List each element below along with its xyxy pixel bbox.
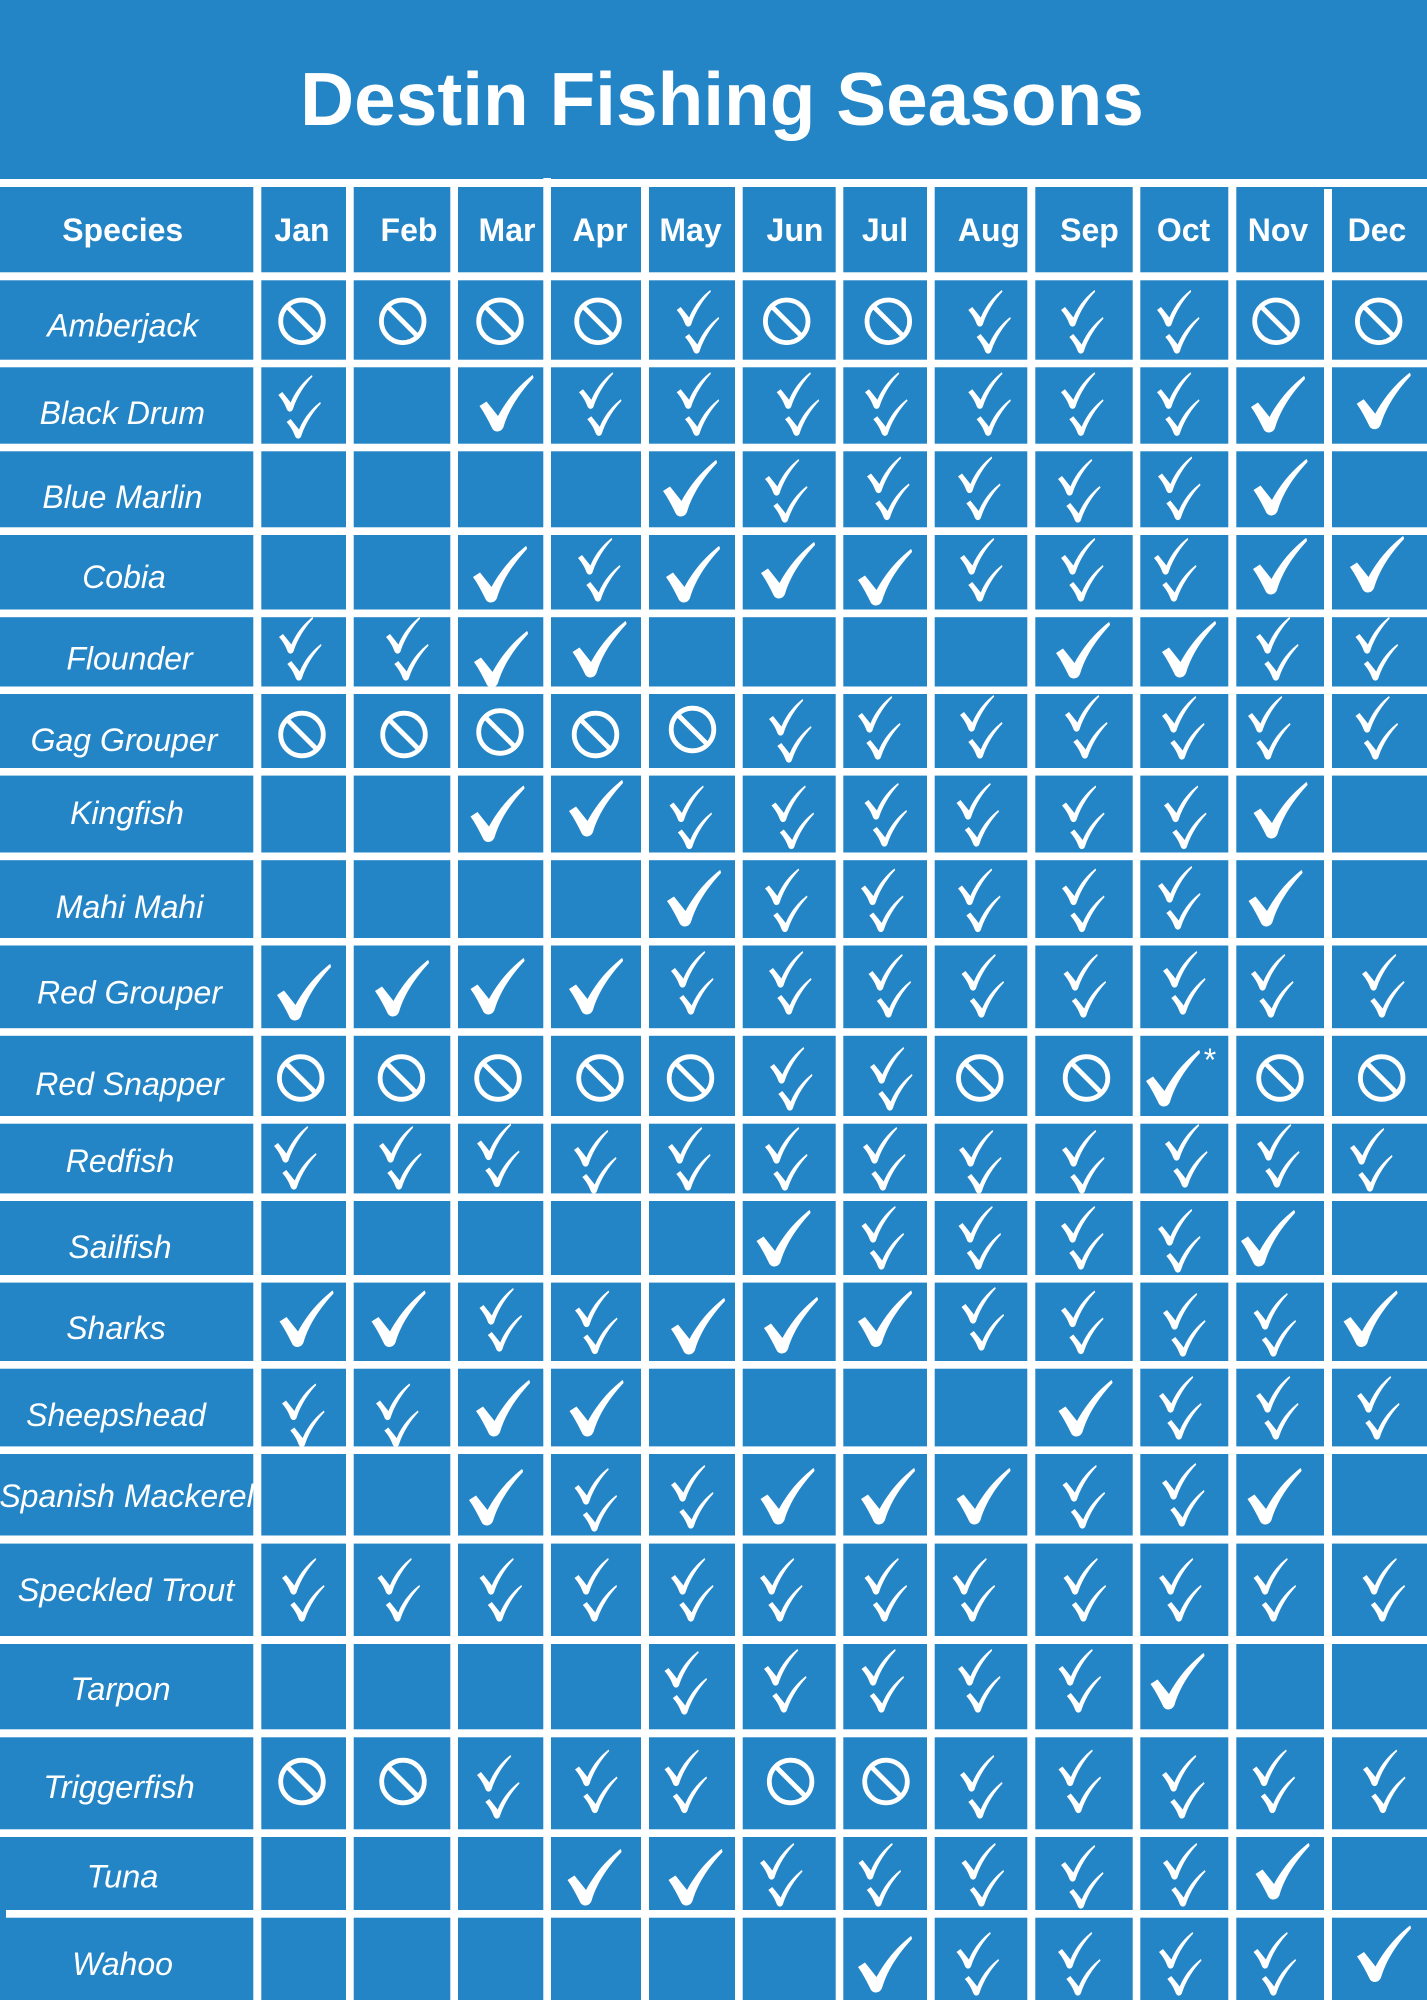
species name: Flounder — [66, 640, 194, 676]
icon: double check Oct — [1165, 1124, 1208, 1188]
icon: single check Nov — [1251, 376, 1305, 432]
icon: single check Oct — [1150, 1653, 1204, 1709]
icon: single check Nov — [1253, 538, 1307, 594]
icon: double check Jun — [765, 1127, 808, 1191]
header: Apr: Apr — [572, 212, 628, 248]
row: Triggerfish — [43, 1750, 1406, 1819]
icon: double check Jul — [862, 1649, 904, 1713]
header: species: Species — [62, 212, 183, 248]
icon: single check Oct — [1146, 1050, 1200, 1106]
icon: double check Oct — [1159, 1558, 1202, 1622]
icon: double check Mar — [480, 1288, 522, 1352]
icon: double check Oct — [1157, 290, 1200, 354]
icon: double check Aug — [958, 1649, 1000, 1713]
icon: closed May — [669, 1057, 712, 1099]
icon: closed Jul — [865, 1760, 907, 1803]
row: Tarpon — [70, 1649, 1204, 1715]
icon: single check Oct — [1162, 621, 1216, 677]
icon: double check Sep — [1061, 1206, 1104, 1270]
row: Red Snapper — [35, 1042, 1403, 1111]
icon: double check Jan — [274, 1126, 316, 1190]
icon: double check Sep — [1061, 290, 1104, 354]
icon: single check Mar — [480, 375, 534, 431]
icon: double check Aug — [958, 868, 1000, 932]
icon: double check Aug — [956, 783, 999, 847]
icon: double check Mar — [480, 1558, 522, 1622]
asterisk footnote mark: * — [1204, 1042, 1216, 1078]
icon: double check Nov — [1254, 1293, 1296, 1357]
row: Speckled Trout — [18, 1558, 1405, 1622]
header: Feb: Feb — [381, 212, 437, 248]
species name: Spanish Mackerel — [0, 1478, 255, 1514]
icon: double check Dec — [1356, 617, 1398, 681]
icon: single check Apr — [569, 958, 623, 1014]
icon: single check Aug — [956, 1468, 1010, 1524]
icon: single check May — [671, 1298, 725, 1354]
title: Destin Fishing Seasons — [300, 57, 1144, 141]
icon: double check Oct — [1163, 1843, 1206, 1907]
header: Oct: Oct — [1157, 212, 1211, 248]
row: Red Grouper — [37, 951, 1404, 1020]
icon: closed Apr — [577, 300, 619, 343]
icon: double check Sep — [1058, 1649, 1101, 1713]
icon: double check Aug — [959, 1130, 1002, 1194]
icon: double check Jul — [858, 696, 900, 760]
header: Aug: Aug — [958, 212, 1020, 248]
icon: double check Nov — [1252, 1750, 1295, 1813]
species name: Wahoo — [72, 1946, 173, 1982]
row: Flounder — [66, 617, 1398, 687]
header: Dec: Dec — [1348, 212, 1406, 248]
icon: single check Jun — [756, 1210, 810, 1266]
icon: double check Nov — [1257, 1124, 1300, 1188]
icon: single check Apr — [570, 1380, 624, 1436]
icon: double check Aug — [962, 954, 1004, 1018]
row: Mahi Mahi — [56, 866, 1302, 932]
icon: double check Jun — [770, 1047, 812, 1111]
icon: closed Jul — [867, 300, 910, 343]
icon: double check May — [670, 786, 712, 849]
row: Kingfish — [70, 780, 1308, 849]
row: Sheepshead — [26, 1376, 1400, 1447]
row: Sharks — [66, 1287, 1398, 1357]
row: Sailfish — [68, 1206, 1295, 1273]
icon: double check Oct — [1162, 1463, 1204, 1527]
icon: double check Dec — [1357, 1376, 1400, 1440]
icon: closed Jan — [281, 713, 323, 756]
icon: single check Apr — [572, 621, 626, 677]
icon: double check Oct — [1158, 866, 1200, 930]
icon: single check Jun — [764, 1297, 818, 1353]
icon: closed Jan — [281, 1760, 323, 1803]
icon: double check Oct — [1158, 1209, 1200, 1273]
icon: double check Aug — [960, 695, 1002, 759]
icon: single check Nov — [1248, 870, 1302, 926]
icon: double check Feb — [378, 1558, 420, 1622]
icon: single check Mar — [470, 786, 524, 842]
icon: double check Jun — [764, 1649, 806, 1713]
icon: double check Nov — [1256, 617, 1298, 681]
icon: double check Apr — [578, 538, 620, 602]
icon: single check Mar — [473, 546, 527, 602]
icon: double check Nov — [1256, 1376, 1298, 1440]
icon: double check May — [671, 1465, 714, 1529]
icon: closed Jun — [765, 300, 808, 343]
icon: double check Sep — [1065, 695, 1108, 759]
icon: double check May — [671, 951, 714, 1015]
icon: double check Aug — [956, 1932, 999, 1996]
icon: single check Jul — [861, 1468, 915, 1524]
icon: closed Nov — [1255, 300, 1297, 343]
icon: closed Apr — [579, 1057, 621, 1099]
icon: single check Jan — [280, 1290, 334, 1347]
icon: double check Oct — [1159, 1376, 1202, 1440]
icon: double check May — [671, 1558, 714, 1622]
icon: closed Nov — [1259, 1057, 1301, 1099]
icon: double check Dec — [1356, 696, 1398, 760]
icon: double check Jun — [777, 372, 819, 436]
species name: Red Snapper — [35, 1066, 225, 1102]
icon: double check Mar — [477, 1755, 520, 1819]
icon: double check Oct — [1162, 1755, 1204, 1819]
species name: Sheepshead — [26, 1397, 207, 1433]
icon: closed Feb — [381, 300, 424, 343]
header row — [62, 212, 1406, 248]
icon: double check Jan — [282, 1558, 324, 1622]
icon: closed Feb — [383, 713, 425, 756]
icon: single check May — [666, 546, 720, 602]
icon: double check Jun — [760, 1558, 802, 1622]
species name: Cobia — [82, 559, 166, 595]
icon: single check Sep — [1058, 1380, 1112, 1436]
icon: double check Nov — [1248, 696, 1290, 760]
row: Black Drum — [40, 372, 1411, 439]
row: Spanish Mackerel — [0, 1463, 1302, 1532]
species name: Kingfish — [70, 795, 184, 831]
icon: double check Aug — [952, 1558, 995, 1622]
icon: closed Jan — [281, 300, 323, 343]
icon: single check Nov — [1241, 1210, 1295, 1266]
icon: double check Jan — [282, 1384, 324, 1447]
icon: double check Jan — [278, 375, 321, 439]
icon: single check Jul — [858, 1290, 912, 1347]
row: Cobia — [82, 536, 1404, 605]
header: Jan: Jan — [274, 212, 330, 248]
species name: Red Grouper — [37, 974, 223, 1010]
icon: single check Jun — [760, 1468, 814, 1524]
icon: double check Dec — [1362, 1558, 1405, 1622]
icon: double check Sep — [1062, 1130, 1104, 1194]
icon: single check Feb — [375, 960, 429, 1016]
icon: single check Mar — [476, 1380, 530, 1436]
icon: single check Apr — [569, 780, 623, 836]
icon: double check Jan — [279, 617, 322, 681]
icon: double check Apr — [575, 1750, 618, 1813]
header: May: May — [659, 212, 722, 248]
header: Sep: Sep — [1060, 212, 1119, 248]
icon: single check Dec — [1357, 373, 1411, 429]
icon: double check Oct — [1158, 456, 1200, 520]
icon: double check Jul — [861, 868, 904, 932]
row: Gag Grouper — [31, 695, 1398, 763]
species name: Amberjack — [45, 308, 200, 344]
icon: double check Apr — [574, 1468, 617, 1532]
icon: single check Feb — [372, 1290, 426, 1347]
icon: single check Nov — [1254, 459, 1308, 515]
icon: double check Jul — [863, 1127, 906, 1191]
species name: Black Drum — [40, 395, 205, 431]
icon: double check Sep — [1062, 868, 1104, 932]
icon: single check Apr — [568, 1849, 622, 1905]
icon: double check Sep — [1058, 1750, 1101, 1813]
icon: double check Feb — [386, 617, 428, 681]
icon: double check Sep — [1064, 954, 1106, 1018]
icon: closed Mar — [477, 1057, 519, 1099]
icon: double check Jun — [769, 951, 812, 1015]
icon: double check Jun — [772, 786, 814, 849]
header: Jun: Jun — [767, 212, 823, 248]
icon: double check Sep — [1064, 1558, 1106, 1622]
icon: double check May — [664, 1651, 707, 1715]
icon: double check Dec — [1362, 954, 1404, 1018]
icon: single check Mar — [470, 958, 524, 1014]
icon: closed May — [671, 708, 714, 751]
icon: double check May — [668, 1127, 710, 1191]
icon: double check Aug — [958, 456, 1000, 520]
icon: single check May — [663, 460, 717, 516]
icon: double check Nov — [1254, 1932, 1296, 1996]
icon: double check Sep — [1062, 786, 1104, 849]
icon: double check Jul — [858, 1843, 901, 1907]
icon: double check Jul — [867, 456, 910, 520]
species name: Tuna — [87, 1858, 158, 1895]
icon: closed Jan — [279, 1057, 322, 1099]
icon: double check May — [677, 290, 719, 354]
icon: double check Apr — [575, 1290, 618, 1354]
icon: double check Jul — [868, 954, 911, 1018]
icon: closed Apr — [574, 713, 617, 756]
icon: double check Sep — [1058, 1932, 1100, 1996]
icon: double check Jul — [870, 1047, 912, 1111]
icon: double check Jun — [765, 868, 808, 932]
icon: double check Oct — [1164, 786, 1206, 849]
species name: Mahi Mahi — [56, 889, 204, 925]
icon: double check Oct — [1159, 1932, 1202, 1996]
icon: closed Sep — [1065, 1057, 1108, 1099]
icon: double check Sep — [1061, 538, 1104, 602]
icon: double check Oct — [1163, 1293, 1206, 1357]
icon: double check Sep — [1061, 372, 1104, 436]
icon: single check Dec — [1344, 1290, 1398, 1347]
species name: Speckled Trout — [18, 1571, 236, 1608]
icon: double check Sep — [1061, 1845, 1104, 1909]
icon: double check Aug — [958, 1206, 1001, 1270]
icon: double check Aug — [960, 538, 1002, 602]
icon: double check May — [677, 372, 719, 436]
icon: double check Aug — [962, 1843, 1004, 1907]
icon: double check Jul — [864, 1558, 907, 1622]
icon: double check Apr — [574, 1558, 617, 1622]
header: Jul: Jul — [862, 212, 908, 248]
row: Redfish — [66, 1124, 1392, 1194]
icon: double check Aug — [960, 1755, 1002, 1819]
icon: closed Dec — [1357, 300, 1400, 343]
icon: single check Dec — [1350, 536, 1404, 592]
icon: double check Oct — [1154, 538, 1196, 602]
icon: double check Sep — [1061, 1290, 1104, 1354]
icon: double check Dec — [1363, 1750, 1406, 1813]
species name: Sailfish — [68, 1229, 172, 1265]
species name: Blue Marlin — [42, 479, 202, 515]
icon: closed Jun — [769, 1760, 812, 1803]
icon: double check Apr — [579, 372, 622, 436]
icon: double check May — [664, 1750, 707, 1813]
icon: double check Oct — [1157, 372, 1200, 436]
species name: Redfish — [66, 1143, 174, 1179]
icon: single check May — [667, 870, 721, 926]
icon: single check Nov — [1248, 1468, 1302, 1524]
row: Wahoo — [72, 1926, 1411, 1996]
icon: single check Sep — [1056, 622, 1110, 678]
icon: single check Jul — [858, 549, 912, 605]
species name: Sharks — [66, 1310, 166, 1346]
icon: double check Jun — [760, 1843, 802, 1907]
icon: double check Aug — [962, 1287, 1004, 1351]
icon: double check Sep — [1062, 1465, 1105, 1529]
icon: double check Dec — [1350, 1128, 1392, 1192]
icon: single check Nov — [1256, 1843, 1310, 1899]
icon: double check Jul — [864, 783, 907, 847]
header: Nov: Nov — [1248, 212, 1308, 248]
icon: double check Jul — [862, 1206, 904, 1270]
icon: double check Oct — [1162, 696, 1204, 760]
icon: double check Apr — [574, 1130, 616, 1194]
icon: double check Sep — [1058, 459, 1100, 523]
icon: double check Oct — [1163, 951, 1206, 1015]
icon: double check Jun — [769, 699, 812, 763]
icon: single check Mar — [474, 631, 528, 687]
icon: single check Jul — [858, 1936, 912, 1992]
row: Amberjack — [45, 290, 1400, 354]
icon: single check Jun — [761, 542, 815, 598]
species name: Gag Grouper — [31, 722, 219, 758]
row: Tuna — [87, 1843, 1310, 1909]
icon: single check Mar — [469, 1469, 523, 1525]
icon: single check May — [668, 1849, 722, 1905]
icon: closed Mar — [479, 711, 521, 753]
icon: single check Jan — [277, 964, 331, 1020]
icon: double check Nov — [1251, 954, 1294, 1018]
icon: closed Feb — [382, 1760, 424, 1803]
icon: double check Aug — [968, 372, 1011, 436]
icon: closed Mar — [479, 300, 521, 343]
icon: double check Mar — [477, 1124, 520, 1187]
icon: double check Jul — [865, 372, 908, 436]
icon: double check Nov — [1254, 1558, 1296, 1622]
species name: Tarpon — [70, 1670, 171, 1707]
icon: single check Dec — [1357, 1926, 1411, 1982]
header: Mar: Mar — [479, 212, 535, 248]
icon: double check Feb — [376, 1384, 418, 1447]
icon: single check Nov — [1254, 782, 1308, 838]
icon: closed Feb — [380, 1057, 423, 1099]
row: Blue Marlin — [42, 456, 1307, 523]
icon: closed Aug — [958, 1057, 1001, 1099]
icon: double check Feb — [379, 1126, 422, 1190]
icon: closed Dec — [1360, 1057, 1403, 1099]
icon: double check Aug — [968, 290, 1011, 354]
icon: double check Jun — [765, 459, 808, 523]
species name: Triggerfish — [43, 1768, 195, 1805]
